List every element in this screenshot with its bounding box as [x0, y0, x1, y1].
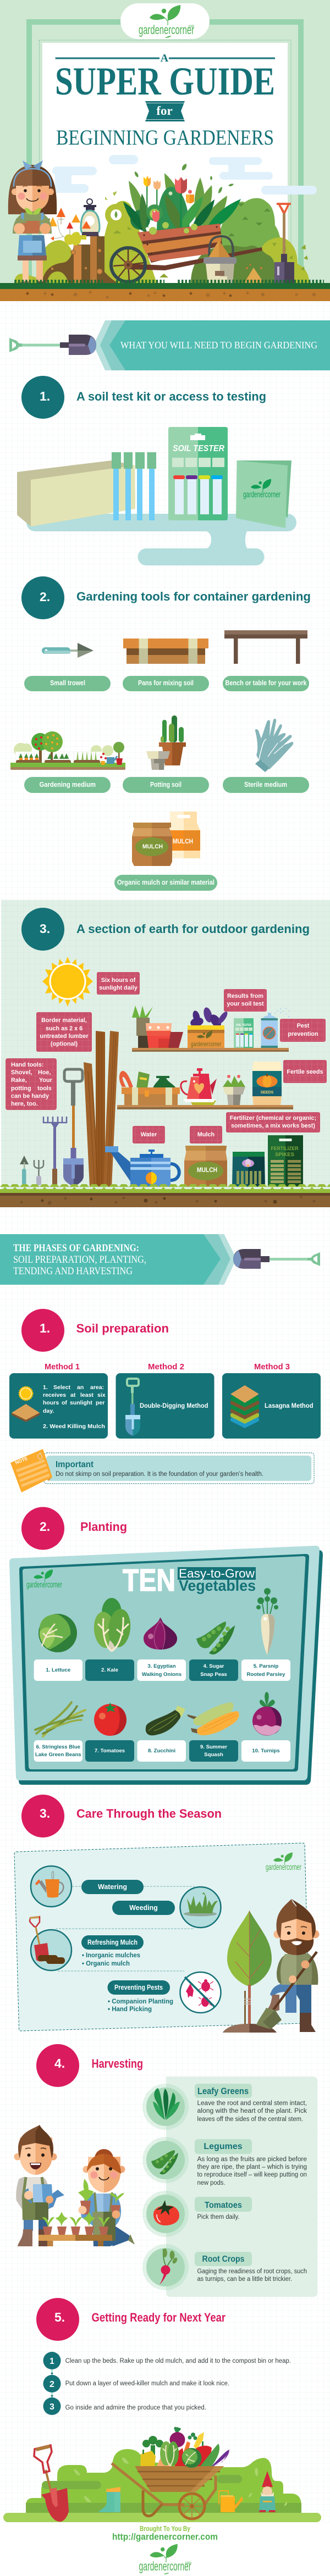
bucket of sand — [204, 236, 264, 283]
phase 5 heading — [36, 2298, 226, 2341]
button: watering — [81, 1880, 144, 1894]
tip: leafy greens: leaves off the sides of the central stem. — [197, 2116, 303, 2123]
icon: radish — [160, 2249, 178, 2285]
title: SUPER GUIDE — [55, 59, 275, 103]
step 1: Clean up the beds. Rake up the old mulch, and add it to the compost bin or heap. — [65, 2358, 291, 2364]
button: potting soil — [123, 777, 209, 793]
mulch bag — [184, 1146, 227, 1187]
logo pill — [120, 3, 210, 39]
tip: root crops: Gaging the readiness of root crops, such — [197, 2268, 307, 2275]
section 2 heading — [21, 576, 311, 619]
label: pest: Pest — [297, 1023, 310, 1029]
label: results: Results from — [227, 993, 263, 1000]
steps list — [43, 2352, 291, 2415]
label: results: your soil test — [227, 1001, 264, 1007]
method labels — [45, 1362, 290, 1372]
labels row 1: Walking Onions — [142, 1672, 182, 1678]
vegetable: sugar snap peas — [196, 1622, 235, 1655]
tool: hand fork — [34, 1160, 43, 1185]
tool: rake — [43, 1117, 67, 1187]
logo: footer: .com — [184, 2560, 191, 2565]
vegetable: kale — [92, 1598, 133, 1651]
button: small trowel — [24, 676, 111, 691]
section 3 heading: 3. — [40, 921, 50, 936]
yellow watering can — [219, 2491, 243, 2512]
labels row 2: Lake Green Beans — [35, 1752, 81, 1758]
tip: tomatoes: Pick them daily. — [197, 2214, 240, 2220]
button: bench — [223, 676, 309, 691]
wheelbarrow — [112, 2463, 224, 2519]
shovel — [274, 203, 294, 283]
tip: tomatoes: Tomatoes — [205, 2201, 242, 2210]
tool: hand trowel — [20, 1156, 29, 1185]
labels row 1: 2. Kale — [101, 1667, 118, 1673]
step 2: Put down a layer of weed-killer mulch and make it look nice. — [65, 2380, 229, 2387]
button: pans: Pans for mixing soil — [138, 679, 194, 687]
step 3 — [43, 2397, 206, 2415]
title: Vegetables — [179, 1577, 256, 1594]
rain boots — [98, 2487, 120, 2512]
step 3: Go inside and admire the produce that you picked. — [65, 2405, 206, 2411]
item: gardening medium — [10, 731, 125, 770]
table and seedlings — [38, 2212, 112, 2246]
title: BEGINNING GARDENERS — [56, 126, 274, 149]
banner: phases of gardening: THE PHASES OF GARDENING: — [13, 1242, 139, 1254]
label: seeds — [283, 1060, 327, 1083]
panel: ten easy-to-grow vegetables — [9, 1546, 323, 1785]
tip: leafy greens: along with the heart of the plant. Pick — [197, 2108, 307, 2114]
logo: footer: gardenercorner — [139, 2559, 191, 2573]
large sapling — [222, 1911, 277, 2033]
icon: no pests — [180, 1972, 221, 2013]
soil tester card: SOIL TESTER — [173, 444, 224, 453]
button: refreshing mulch: Refreshing Mulch — [87, 1939, 138, 1946]
item: bench — [224, 630, 307, 664]
tree stump — [51, 236, 118, 283]
lumber boards — [84, 1031, 119, 1187]
man — [14, 2125, 64, 2246]
phase 1 heading: Soil preparation — [76, 1322, 169, 1335]
icon: note: NOTE — [14, 1456, 29, 1465]
card: method 1: an — [77, 1384, 84, 1391]
phase 3 heading: 3. — [40, 1806, 50, 1820]
method labels: Method 1 — [45, 1362, 80, 1372]
tip: legumes: Legumes — [204, 2142, 243, 2151]
tip: leafy greens — [142, 2084, 307, 2130]
card: method 1: six — [97, 1392, 106, 1398]
card: method 1: at — [70, 1392, 76, 1398]
tool: shovel — [63, 1069, 84, 1187]
section 3 heading — [21, 908, 310, 951]
card: method 3 — [222, 1373, 321, 1439]
icon: weeds — [180, 1887, 221, 1928]
label: hand tools: here, too. — [11, 1101, 38, 1107]
ground — [0, 1184, 330, 1207]
phase 2 heading: 2. — [40, 1519, 50, 1534]
card: method 1: of — [62, 1400, 67, 1406]
button: gardening medium — [24, 777, 111, 793]
vegetables in barrow — [140, 2427, 229, 2468]
item: gloves — [255, 719, 293, 772]
upper shelf with items: SOIL TESTER — [236, 1024, 251, 1027]
card: method 1: receives — [43, 1392, 66, 1398]
logo — [266, 1852, 301, 1872]
button: sterile medium — [223, 777, 309, 793]
logo — [26, 1569, 62, 1590]
title: Easy-to-Grow — [179, 1567, 255, 1580]
phase 1 heading: 1. — [40, 1321, 50, 1335]
label: hand tools: Hoe, — [38, 1069, 51, 1076]
card: method 1: Select — [53, 1384, 70, 1391]
phase 1 heading — [21, 1309, 169, 1352]
upper shelf with items: gardenercorner — [191, 1040, 221, 1048]
tip: legumes: new pods. — [197, 2180, 226, 2186]
character: girl — [8, 160, 57, 286]
red shovel — [34, 2445, 69, 2522]
card: method 2 — [116, 1373, 215, 1439]
label: border: (optional) — [51, 1041, 78, 1047]
step 2 — [43, 2375, 229, 2392]
card: method 1: 2. Weed Killing Mulch — [43, 1423, 105, 1430]
section 2 heading: 2. — [40, 590, 50, 604]
label: water — [133, 1126, 165, 1143]
label: fertilizer — [226, 1112, 320, 1132]
label: hand tools: Rake, — [11, 1077, 27, 1084]
callout: important note: Important — [56, 1460, 94, 1469]
card: method 1: area: — [90, 1384, 104, 1391]
garden gnome — [259, 2471, 276, 2512]
tip: root crops: as turnips, can be a little bit trickier. — [197, 2276, 292, 2283]
icon: sun — [42, 957, 93, 1007]
icon: tomato — [153, 2200, 179, 2225]
test strips — [112, 452, 156, 520]
icon: spade — [9, 335, 96, 355]
fertilizer spikes: FERTILIZER — [271, 1146, 299, 1152]
item: potting soil — [146, 715, 186, 770]
tip: root crops — [142, 2244, 307, 2290]
card: method 1: per — [96, 1400, 105, 1406]
labels row 2: Squash — [204, 1752, 223, 1758]
labels row 2: 6. Stringless Blue — [36, 1744, 80, 1750]
banner: phases of gardening: TENDING AND HARVESTING — [13, 1265, 133, 1277]
step 3: 3 — [50, 2402, 54, 2412]
tip: legumes: As long as the fruits are picked before — [197, 2156, 307, 2163]
button: refreshing mulch — [81, 1935, 144, 1967]
tip: root crops: Root Crops — [202, 2255, 245, 2264]
lower shelf with items: SEEDS — [261, 1091, 274, 1095]
item: mulch bags — [132, 812, 200, 866]
section 1 heading: A soil test kit or access to testing — [76, 390, 266, 403]
frame — [26, 19, 304, 283]
label: hand tools: Hand tools: — [11, 1062, 43, 1068]
labels row 1: 4. Sugar — [204, 1663, 224, 1669]
credit: http://gardenercorner.com — [112, 2531, 218, 2542]
button: weeding — [112, 1901, 175, 1915]
wheelbarrow — [111, 222, 262, 282]
fertilizer spikes: SPIKES — [275, 1152, 294, 1158]
vegetable: green beans — [35, 1702, 85, 1736]
button: preventing pests — [108, 1980, 173, 2013]
label: water: Water — [141, 1131, 157, 1138]
section 1 heading: 1. — [40, 389, 50, 403]
logo: gardenercorner — [266, 1863, 301, 1872]
label: border: such as 2 x 6 — [46, 1025, 82, 1032]
label: hand tools: can be handy — [11, 1093, 49, 1100]
mulch bag: MULCH — [197, 1167, 217, 1174]
card: method 1: hours — [43, 1400, 59, 1406]
icon: digging spade — [125, 1379, 140, 1436]
tip: legumes — [142, 2137, 307, 2186]
button: gardening medium: Gardening medium — [40, 781, 96, 789]
woman — [78, 2149, 135, 2246]
lantern and mushrooms — [48, 191, 117, 246]
icon: spade — [233, 1249, 320, 1269]
label: sunlight: Six hours of — [101, 977, 136, 984]
labels row 1: Snap Peas — [200, 1672, 227, 1678]
vegetable: red onion — [144, 1617, 177, 1650]
title — [55, 52, 275, 149]
teal blob — [26, 514, 296, 565]
labels row 2: 8. Zucchini — [148, 1748, 175, 1754]
phase 3 heading: Care Through the Season — [76, 1807, 222, 1820]
item: mulch bags: MULCH — [173, 839, 193, 845]
ground bar — [3, 2513, 321, 2522]
button: preventing pests: • Hand Picking — [108, 2005, 152, 2013]
logo pill: .com — [188, 24, 194, 29]
card: method 1: least — [80, 1392, 94, 1398]
grass strip — [13, 280, 103, 283]
labels row 1: Rooted Parsley — [247, 1672, 285, 1678]
vegetable: parsnip — [256, 1588, 278, 1655]
button: weeding: Weeding — [129, 1904, 158, 1912]
booklet: gardenercorner — [243, 490, 280, 499]
phase 5 heading: 5. — [54, 2310, 65, 2324]
step 1 — [43, 2352, 291, 2369]
card: method 1: 1. — [43, 1384, 48, 1391]
section 1 heading — [21, 376, 266, 419]
clouds — [52, 155, 317, 195]
upper shelf with items — [132, 1006, 290, 1052]
panel: section of earth — [0, 900, 330, 1207]
card: method 1 — [9, 1373, 108, 1439]
soil tester card — [168, 427, 228, 520]
step 1: 1 — [50, 2357, 54, 2366]
label: hand tools — [6, 1058, 57, 1110]
label: border — [36, 1012, 92, 1052]
callout: important note: Do not skimp on soil preparation. It is the foundation of your garden’s health. — [56, 1471, 263, 1478]
button: organic mulch — [114, 875, 217, 891]
fertilizer spikes — [268, 1135, 303, 1187]
button: preventing pests: • Companion Planting — [108, 1997, 173, 2005]
banner: phases of gardening — [0, 1234, 320, 1285]
footer garden scene — [3, 2427, 321, 2522]
tip: tomatoes — [142, 2191, 252, 2237]
banner: phases of gardening: SOIL PREPARATION, PLANTING, — [13, 1254, 146, 1265]
icon: sun — [19, 1387, 33, 1400]
label: hand tools: potting — [11, 1085, 31, 1092]
method labels: Method 2 — [148, 1362, 184, 1372]
label: pest: prevention — [288, 1031, 318, 1037]
icon: soil tile — [12, 1404, 40, 1422]
vegetable: lettuce — [38, 1614, 77, 1652]
label: results — [224, 989, 267, 1012]
step 2: 2 — [50, 2380, 54, 2389]
title: TEN — [123, 1563, 175, 1598]
phase 4 heading: 4. — [54, 2056, 65, 2070]
icon: note — [10, 1449, 52, 1492]
icon: shovel and mulch — [30, 1916, 72, 1970]
panel: harvesting tips — [142, 2077, 317, 2297]
vegetable: tomato — [94, 1702, 127, 1736]
button: potting soil: Potting soil — [150, 781, 182, 789]
soil test kit illustration — [17, 427, 296, 565]
button: organic mulch: Organic mulch or similar material — [117, 879, 215, 886]
button: watering: Watering — [98, 1883, 127, 1891]
title: for — [156, 104, 173, 118]
labels row 1: 1. Lettuce — [46, 1667, 70, 1673]
labels row 2: 9. Summer — [200, 1744, 227, 1750]
phase 4 heading — [36, 2044, 143, 2087]
labels row 1 — [34, 1659, 290, 1681]
phase 2 heading — [21, 1507, 127, 1550]
callout: important note — [10, 1449, 314, 1492]
logo pill: gardenercorner — [139, 23, 194, 37]
button: preventing pests: Preventing Pests — [114, 1984, 163, 1991]
label: hand tools: Shovel, — [11, 1069, 32, 1076]
item: small trowel — [42, 643, 94, 658]
label: hand tools: tools — [37, 1085, 52, 1092]
beige box — [17, 460, 135, 526]
section 2 heading: Gardening tools for container gardening — [76, 590, 311, 603]
title: A — [161, 52, 169, 64]
method labels: Method 3 — [254, 1362, 290, 1372]
panel: care through the season — [14, 1843, 309, 2031]
vegetable: zucchini — [146, 1706, 185, 1735]
logo: footer — [139, 2544, 191, 2574]
labels row 1: 3. Egyptian — [147, 1663, 176, 1669]
label: sunlight: sunlight daily — [99, 985, 138, 991]
labels row 1: 5. Parsnip — [254, 1663, 279, 1669]
tip: legumes: they are ripe, the plant – which is trying — [197, 2164, 307, 2170]
icon: leafy greens — [153, 2088, 180, 2120]
button: sterile medium: Sterile medium — [244, 781, 287, 789]
characters: harvesting gardeners — [14, 2125, 135, 2246]
tip: legumes: to reproduce itself – will keep putting on — [197, 2172, 307, 2178]
label: mulch — [190, 1126, 222, 1143]
label: hand tools: Your — [39, 1077, 53, 1084]
garden bushes — [14, 198, 309, 283]
label: mulch: Mulch — [197, 1131, 215, 1138]
plants and tulips — [123, 164, 241, 237]
logo: gardenercorner — [26, 1580, 62, 1590]
button: pans — [123, 676, 209, 691]
label: border: untreated lumber — [40, 1033, 89, 1040]
header scene — [0, 0, 330, 301]
label: fertilizer: Fertilizer (chemical or organic; — [230, 1115, 316, 1122]
vegetable: summer squash — [187, 1702, 239, 1735]
card: method 3: Lasagna Method — [265, 1402, 314, 1409]
title — [123, 1563, 256, 1598]
orchid pack — [232, 1152, 265, 1187]
phase 5 heading: Getting Ready for Next Year — [91, 2311, 226, 2324]
vegetable: turnip — [252, 1692, 282, 1735]
label: border: Border material, — [41, 1017, 87, 1024]
credit — [112, 2525, 218, 2542]
phase 4 heading: Harvesting — [91, 2057, 143, 2070]
item: pans for mixing soil — [123, 639, 208, 664]
credit: Brought To You By — [140, 2525, 190, 2533]
card: method 1: day. — [43, 1408, 54, 1414]
icon: layered soil stack — [230, 1385, 259, 1428]
character: bearded gardener — [256, 1899, 319, 2032]
section 3 heading: A section of earth for outdoor gardening — [76, 922, 310, 936]
tip: leafy greens: Leafy Greens — [197, 2086, 249, 2096]
labels row 2: 7. Tomatoes — [95, 1748, 125, 1754]
label: seeds: Fertile seeds — [287, 1069, 323, 1075]
label: sunlight — [97, 972, 140, 995]
watering can — [105, 1146, 179, 1187]
card: method 2: Double-Digging Method — [140, 1402, 208, 1409]
lower shelf with items — [117, 1062, 293, 1109]
button: refreshing mulch: • Organic mulch — [82, 1959, 130, 1967]
booklet — [236, 460, 292, 528]
bush — [26, 2449, 301, 2513]
labels row 2: 10. Turnips — [252, 1748, 280, 1754]
button: bench: Bench or table for your work — [226, 679, 307, 687]
phase 2 heading: Planting — [80, 1520, 127, 1534]
label: pest — [280, 1019, 326, 1042]
icon: watering — [31, 1866, 72, 1907]
phase 3 heading — [21, 1795, 222, 1837]
label: fertilizer: sometimes, a mix works best) — [231, 1123, 315, 1129]
card: method 1: sunlight — [70, 1400, 92, 1406]
tip: leafy greens: Leave the root and central stem intact, — [197, 2100, 307, 2107]
labels row 2 — [34, 1740, 290, 1762]
banner: what you will need — [9, 320, 330, 370]
icon: pea pods — [151, 2150, 178, 2174]
button: refreshing mulch: • Inorganic mulches — [82, 1951, 140, 1959]
item: mulch bags: MULCH — [142, 843, 163, 850]
button: small trowel: Small trowel — [50, 679, 85, 687]
soil strip — [0, 289, 330, 301]
